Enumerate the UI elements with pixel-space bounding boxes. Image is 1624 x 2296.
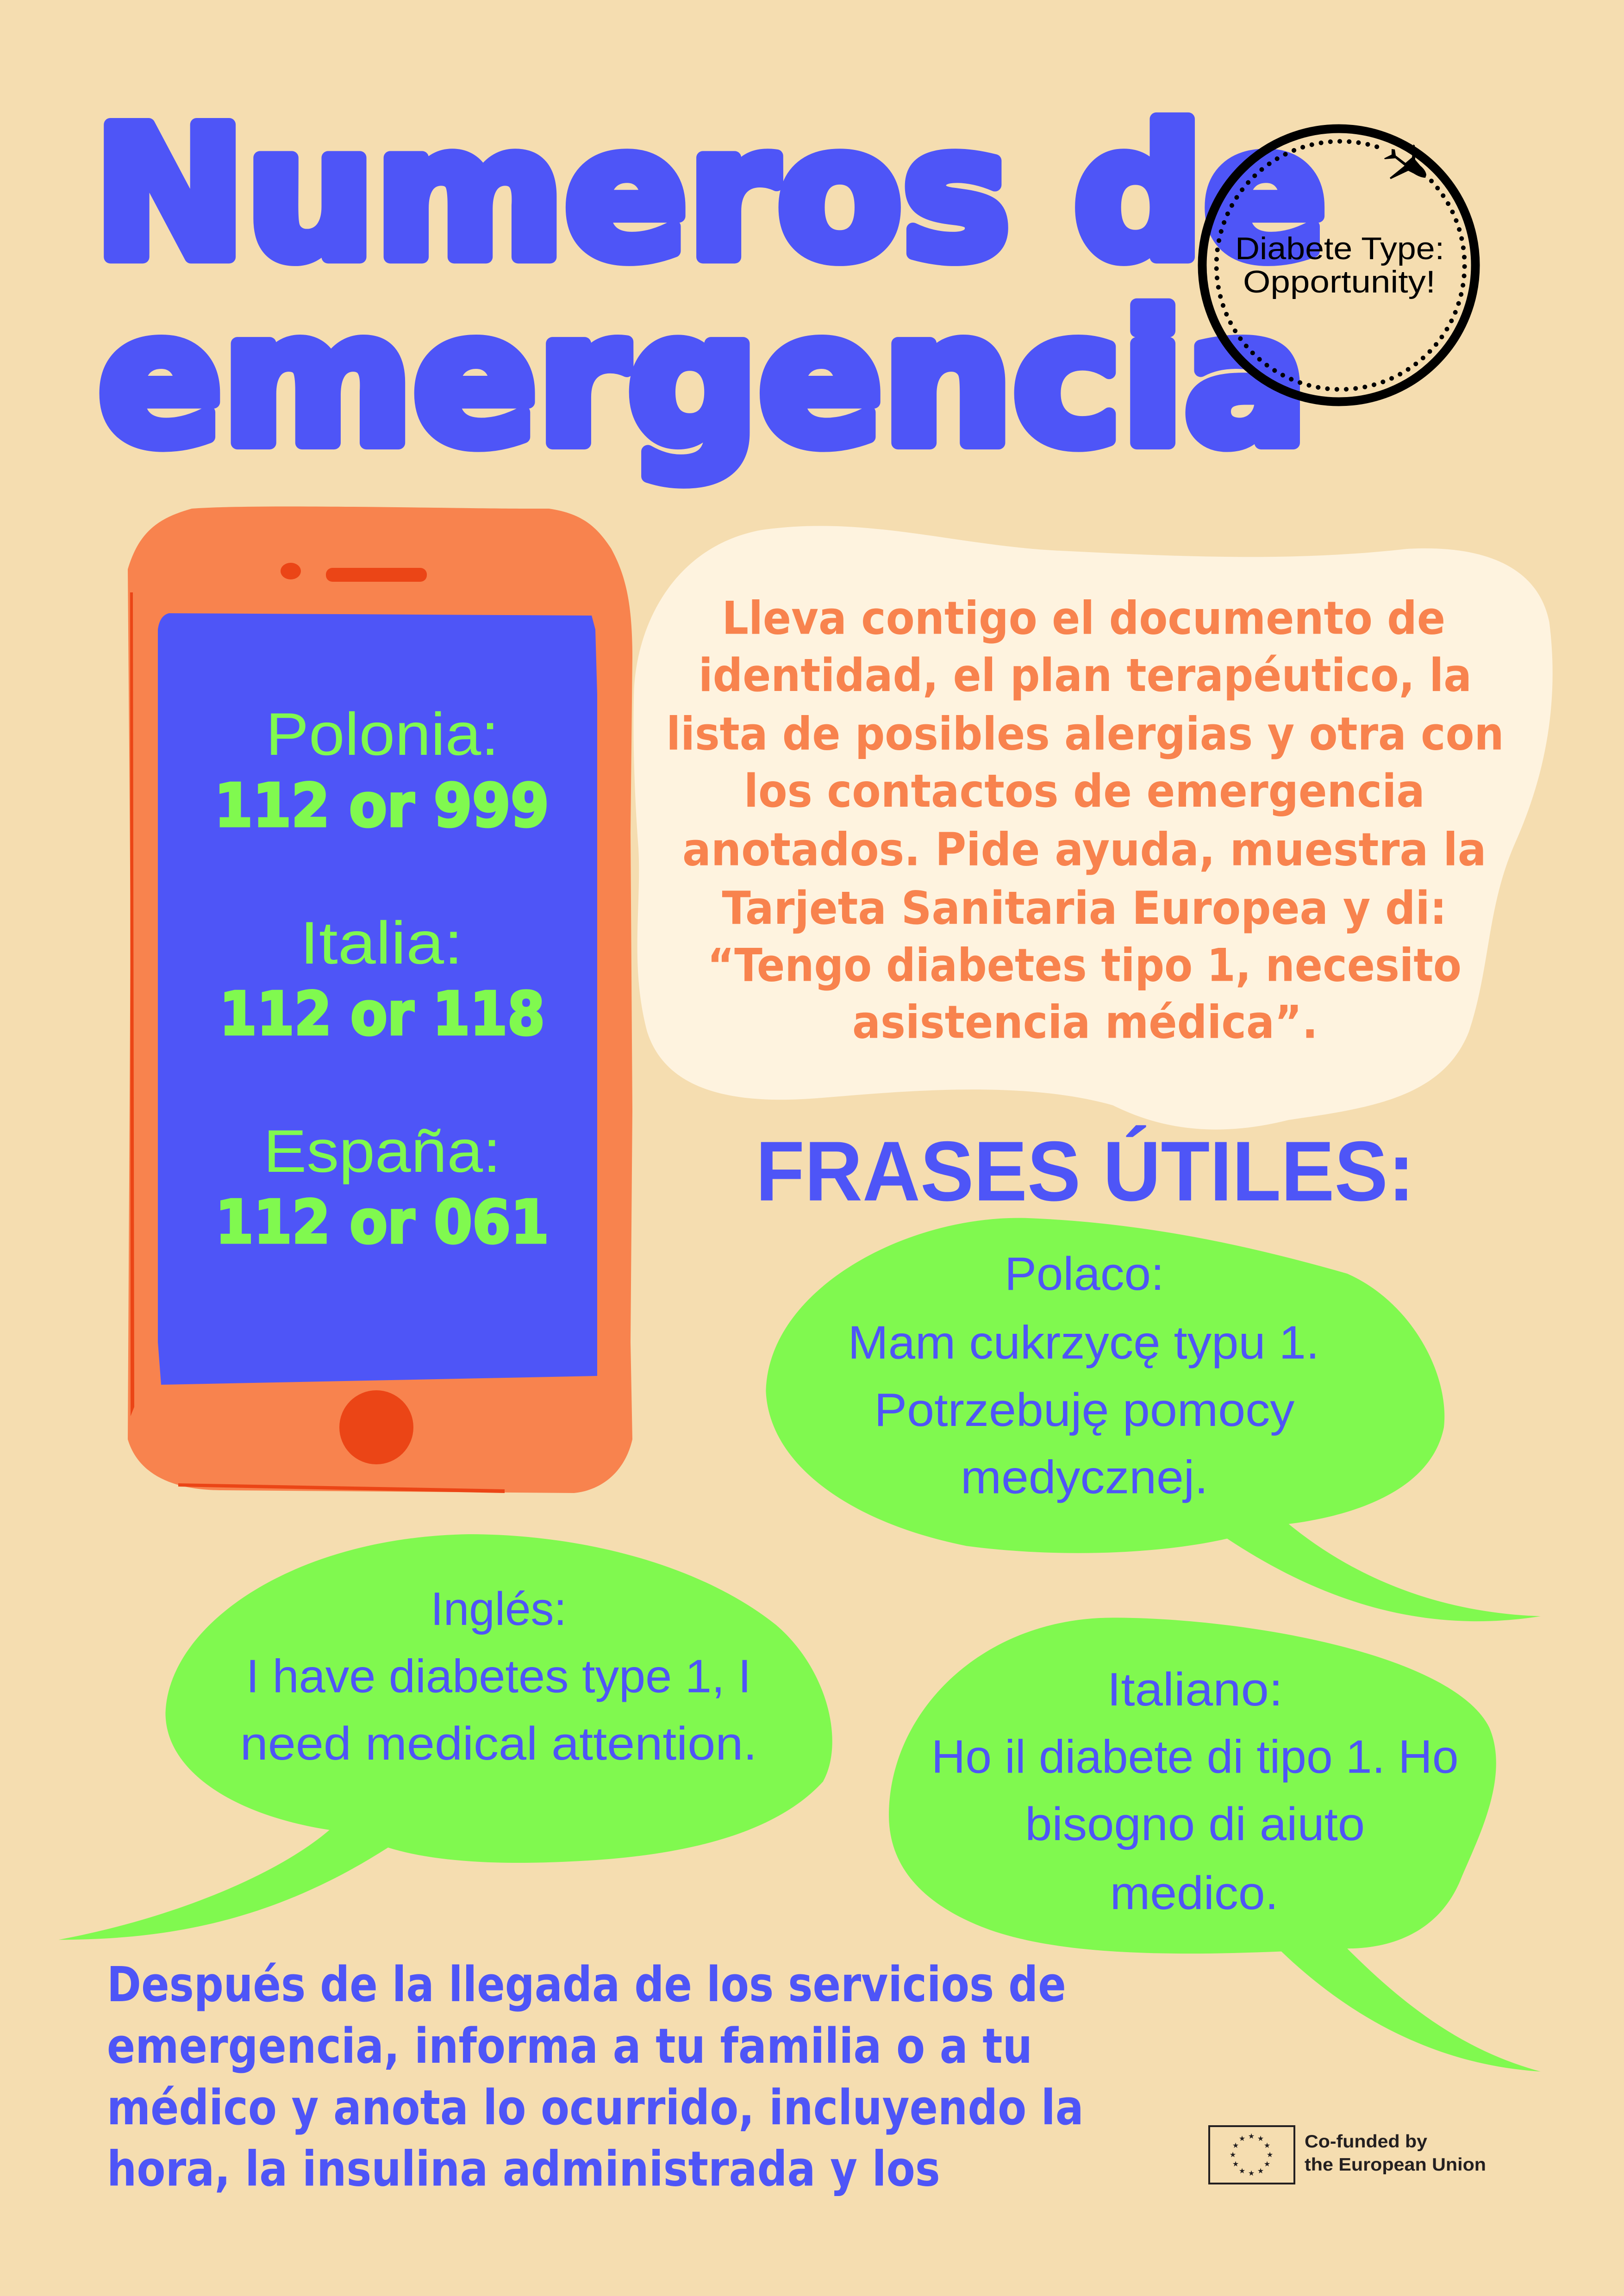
phone body (128, 506, 632, 1493)
EU text: Co-funded by (1305, 2132, 1427, 2152)
advice text: Tarjeta Sanitaria Europea y di: (722, 882, 1447, 935)
speech bubble: Polaco: Potrzebuję pomocy (874, 1384, 1295, 1436)
advice text: lista de posibles alergias y otra con (666, 708, 1504, 761)
speech bubble: Polaco: Mam cukrzycę typu 1. (848, 1316, 1319, 1369)
EU stars: ★ (1239, 2166, 1245, 2175)
EU stars: ★ (1230, 2150, 1236, 2159)
title (94, 88, 1327, 486)
speech bubble: Italiano: Italiano: (1107, 1663, 1283, 1716)
phone edge stroke (130, 592, 505, 1493)
numbers: Polonia: Polonia: (266, 700, 499, 768)
speech bubble: Italiano: Ho il diabete di tipo 1. Ho (931, 1731, 1459, 1783)
phone camera (281, 563, 301, 579)
speech bubble: Italiano (889, 1618, 1541, 2072)
speech bubble: Italiano: medico. (1110, 1867, 1278, 1919)
numbers: España (215, 1117, 549, 1257)
badge text: Opportunity! (1243, 264, 1436, 299)
text block: after emergency services arrive (107, 1956, 1084, 2197)
EU stars: ★ (1248, 2169, 1255, 2178)
EU text (1305, 2132, 1486, 2175)
advice text: identidad, el plan terapéutico, la (699, 649, 1472, 702)
EU stars: ★ (1267, 2150, 1273, 2159)
speech bubble: Inglés: I have diabetes type 1, I (246, 1650, 751, 1703)
numbers: Italia (219, 909, 545, 1049)
numbers: Italia: 112 or 118 (219, 980, 545, 1049)
speech bubble: Polaco: medycznej. (961, 1451, 1208, 1503)
EU stars: ★ (1264, 2159, 1270, 2168)
EU stars (1230, 2132, 1273, 2178)
icon: airplane (1384, 144, 1426, 179)
text block: after emergency services arrive: médico y anota lo ocurrido, incluyendo la (107, 2079, 1084, 2136)
speech bubble: Italiano: bisogno di aiuto (1025, 1798, 1365, 1850)
advice text: los contactos de emergencia (744, 765, 1425, 818)
advice text (666, 592, 1504, 1049)
EU stars: ★ (1232, 2159, 1239, 2168)
EU stars: ★ (1257, 2134, 1264, 2143)
numbers: España: 112 or 061 (215, 1188, 549, 1257)
text block: after emergency services arrive: hora, la insulina administrada y los (107, 2141, 940, 2197)
EU stars: ★ (1232, 2141, 1239, 2150)
numbers: Polonia (214, 700, 549, 840)
phone home button (339, 1390, 413, 1464)
phone speaker (326, 568, 427, 582)
text block: after emergency services arrive: Después de la llegada de los servicios de (107, 1956, 1066, 2013)
title: Numeros de (94, 88, 1327, 300)
advice text: “Tengo diabetes tipo 1, necesito (707, 939, 1462, 992)
panel: advice blob (633, 526, 1553, 1130)
EU flag outline (1209, 2126, 1294, 2184)
heading: useful phrases: FRASES ÚTILES: (756, 1124, 1415, 1219)
speech bubble: Polaco: Polaco: (1005, 1248, 1164, 1300)
numbers: Italia: Italia: (300, 909, 463, 977)
EU stars: ★ (1264, 2141, 1270, 2150)
badge text (1235, 231, 1444, 299)
EU stars: ★ (1248, 2132, 1255, 2140)
EU stars: ★ (1239, 2134, 1245, 2143)
advice text: anotados. Pide ayuda, muestra la (682, 823, 1487, 876)
text block: after emergency services arrive: emergencia, informa a tu familia o a tu (107, 2018, 1032, 2074)
numbers: España: España: (263, 1117, 501, 1185)
blob background (633, 526, 1553, 1130)
speech bubble: Inglés (59, 1534, 832, 1940)
EU text: the European Union (1305, 2155, 1486, 2175)
badge: Diabete Type stamp (1202, 129, 1475, 402)
advice text: asistencia médica”. (852, 996, 1318, 1049)
speech bubble: Polaco (766, 1218, 1541, 1621)
logo: co-funded by the European Union (1209, 2126, 1486, 2184)
speech bubble: Inglés: need medical attention. (240, 1717, 757, 1770)
speech bubble: Inglés: Inglés: (431, 1583, 567, 1635)
numbers: Polonia: 112 or 999 (214, 772, 549, 840)
phone illustration with emergency numbers (128, 506, 632, 1493)
badge text: Diabete Type: (1235, 231, 1444, 266)
EU stars: ★ (1257, 2166, 1264, 2175)
advice text: Lleva contigo el documento de (722, 592, 1445, 645)
phone screen (158, 613, 597, 1385)
title: emergencia (98, 274, 1308, 486)
